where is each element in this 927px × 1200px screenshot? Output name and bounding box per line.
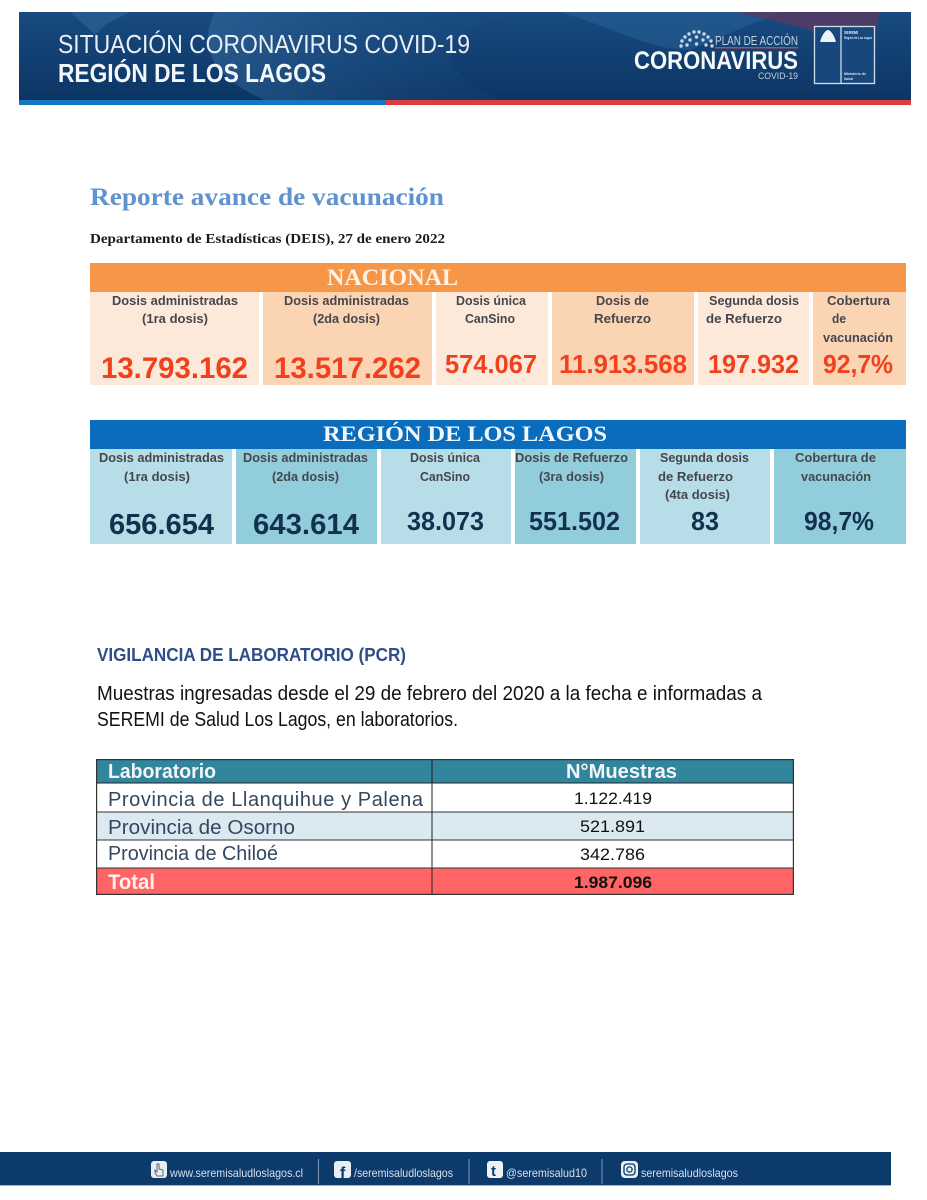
footer item: tumblr: @seremisalud10 — [506, 1166, 587, 1180]
nacional stat: cobertura: Cobertura — [827, 293, 891, 308]
footer item: website: www.seremisaludloslagos.cl — [169, 1166, 303, 1180]
header banner — [19, 12, 911, 105]
region stat: cobertura: vacunación — [801, 469, 871, 484]
nacional stat: segunda dosis de refuerzo — [698, 292, 809, 385]
section heading: vigilancia: VIGILANCIA DE LABORATORIO (PCR) — [97, 645, 406, 665]
banner title: REGIÓN DE LOS LAGOS — [58, 58, 326, 88]
seremi logo: Ministerio de — [844, 72, 866, 76]
region stat: refuerzo: Dosis de Refuerzo — [515, 450, 628, 465]
nacional stat: 1ra dosis: (1ra dosis) — [142, 311, 208, 326]
seremi logo: SEREMI — [844, 30, 858, 35]
plan de accion logo: CORONAVIRUS — [634, 47, 798, 75]
region stat: refuerzo: 551.502 — [529, 506, 620, 536]
nacional stat: 2da dosis: 13.517.262 — [274, 352, 421, 385]
nacional stat: segunda dosis de refuerzo: 197.932 — [708, 349, 799, 379]
footer item: tumblr — [487, 1161, 587, 1180]
footer bar — [0, 1152, 891, 1186]
nacional stat: dosis unica: CanSino — [465, 311, 515, 326]
footer item: facebook: f — [340, 1165, 346, 1182]
region stat: 1ra dosis — [90, 449, 232, 544]
nacional heading — [90, 263, 906, 292]
region stat: 2da dosis: Dosis administradas — [243, 450, 368, 465]
text block: muestras: SEREMI de Salud Los Lagos, en laboratorios. — [97, 709, 458, 731]
footer item: instagram — [621, 1161, 738, 1180]
table row: llanquihue y palena: 1.122.419 — [574, 789, 652, 808]
region stat: cobertura: Cobertura de — [795, 450, 876, 465]
region stat: 2da dosis: 643.614 — [253, 509, 359, 541]
table row: total: Total — [108, 871, 155, 894]
nacional stat: cobertura: de — [832, 311, 846, 326]
table row: osorno: Provincia de Osorno — [108, 817, 295, 839]
region stat: 1ra dosis: Dosis administradas — [99, 450, 224, 465]
seremi logo — [814, 26, 874, 84]
table row: chiloe: Provincia de Chiloé — [108, 843, 278, 865]
nacional stat: cobertura: 92,7% — [823, 349, 893, 379]
nacional stat: refuerzo: 11.913.568 — [559, 349, 687, 379]
nacional stat: cobertura: vacunación — [823, 330, 893, 345]
seremi logo: Salud — [844, 77, 853, 81]
report subtitle: Departamento de Estadísticas (DEIS), 27 de enero 2022 — [90, 231, 445, 246]
nacional stat: segunda dosis de refuerzo: de Refuerzo — [706, 311, 782, 326]
table row: chiloe: 342.786 — [580, 845, 645, 864]
table: laboratorios — [96, 759, 794, 895]
region stat: refuerzo — [515, 449, 636, 544]
seremi logo: Región de Los Lagos — [844, 36, 872, 40]
region stat: segunda dosis de refuerzo: Segunda dosis — [660, 450, 749, 465]
region heading: REGIÓN DE LOS LAGOS — [323, 421, 607, 446]
region stat: 2da dosis — [236, 449, 377, 544]
table header: Laboratorio — [108, 761, 216, 783]
footer item: facebook: /seremisaludloslagos — [354, 1166, 453, 1180]
nacional stat: cobertura — [813, 292, 906, 385]
nacional stat: 1ra dosis: Dosis administradas — [112, 293, 238, 308]
nacional stat: dosis unica: 574.067 — [445, 349, 537, 379]
nacional stat: 2da dosis: (2da dosis) — [313, 311, 380, 326]
region stat: cobertura: 98,7% — [804, 506, 874, 536]
table header: N°Muestras — [566, 761, 677, 783]
region stat: dosis unica: CanSino — [420, 469, 470, 484]
panel: region de los lagos — [90, 420, 906, 544]
nacional stat: dosis unica — [436, 292, 548, 385]
table row: osorno — [108, 817, 645, 839]
nacional heading: NACIONAL — [327, 265, 458, 290]
table row: llanquihue y palena — [108, 789, 652, 811]
region stat: refuerzo: (3ra dosis) — [539, 469, 604, 484]
region stat: 1ra dosis: (1ra dosis) — [124, 469, 190, 484]
footer item: instagram: seremisaludloslagos — [641, 1166, 738, 1180]
region stat: segunda dosis de refuerzo: 83 — [691, 506, 719, 536]
nacional stat: segunda dosis de refuerzo: Segunda dosis — [709, 293, 799, 308]
footer item: website — [151, 1161, 303, 1180]
region stat: dosis unica: Dosis única — [410, 450, 481, 465]
region stat: segunda dosis de refuerzo: de Refuerzo — [658, 469, 733, 484]
banner title: SITUACIÓN CORONAVIRUS COVID-19 — [58, 29, 470, 59]
table header — [108, 761, 677, 783]
region heading — [90, 420, 906, 449]
table row: osorno: 521.891 — [580, 817, 645, 836]
nacional stat: 2da dosis: Dosis administradas — [284, 293, 409, 308]
region stat: dosis unica — [381, 449, 511, 544]
plan de accion logo: PLAN DE ACCIÓN — [715, 33, 798, 48]
nacional stat: refuerzo: Dosis de — [596, 293, 649, 308]
nacional stat: 1ra dosis: 13.793.162 — [101, 352, 248, 385]
region stat: segunda dosis de refuerzo: (4ta dosis) — [665, 487, 730, 502]
table row: llanquihue y palena: Provincia de Llanquihue y Palena — [108, 789, 424, 811]
plan de accion logo: COVID-19 — [758, 71, 798, 81]
region stat: dosis unica: 38.073 — [407, 506, 484, 536]
nacional stat: refuerzo — [552, 292, 694, 385]
nacional stat: 1ra dosis — [90, 292, 259, 385]
text block: muestras — [97, 683, 763, 731]
region stat: cobertura — [774, 449, 906, 544]
nacional stat: dosis unica: Dosis única — [456, 293, 527, 308]
table row: chiloe — [108, 843, 645, 865]
table row: total — [108, 871, 652, 894]
region stat: segunda dosis de refuerzo — [640, 449, 770, 544]
table row: total: 1.987.096 — [574, 873, 652, 892]
report title: Reporte avance de vacunación — [90, 184, 444, 211]
region stat: 2da dosis: (2da dosis) — [272, 469, 339, 484]
footer item: facebook — [334, 1161, 453, 1182]
panel: nacional — [90, 263, 906, 385]
nacional stat: refuerzo: Refuerzo — [594, 311, 651, 326]
plan de accion logo — [634, 30, 798, 81]
nacional stat: 2da dosis — [263, 292, 432, 385]
footer item: tumblr: t — [491, 1163, 496, 1180]
text block: muestras: Muestras ingresadas desde el 29 de febrero del 2020 a la fecha e informadas a — [97, 683, 763, 705]
banner title — [58, 29, 470, 88]
region stat: 1ra dosis: 656.654 — [109, 509, 214, 541]
